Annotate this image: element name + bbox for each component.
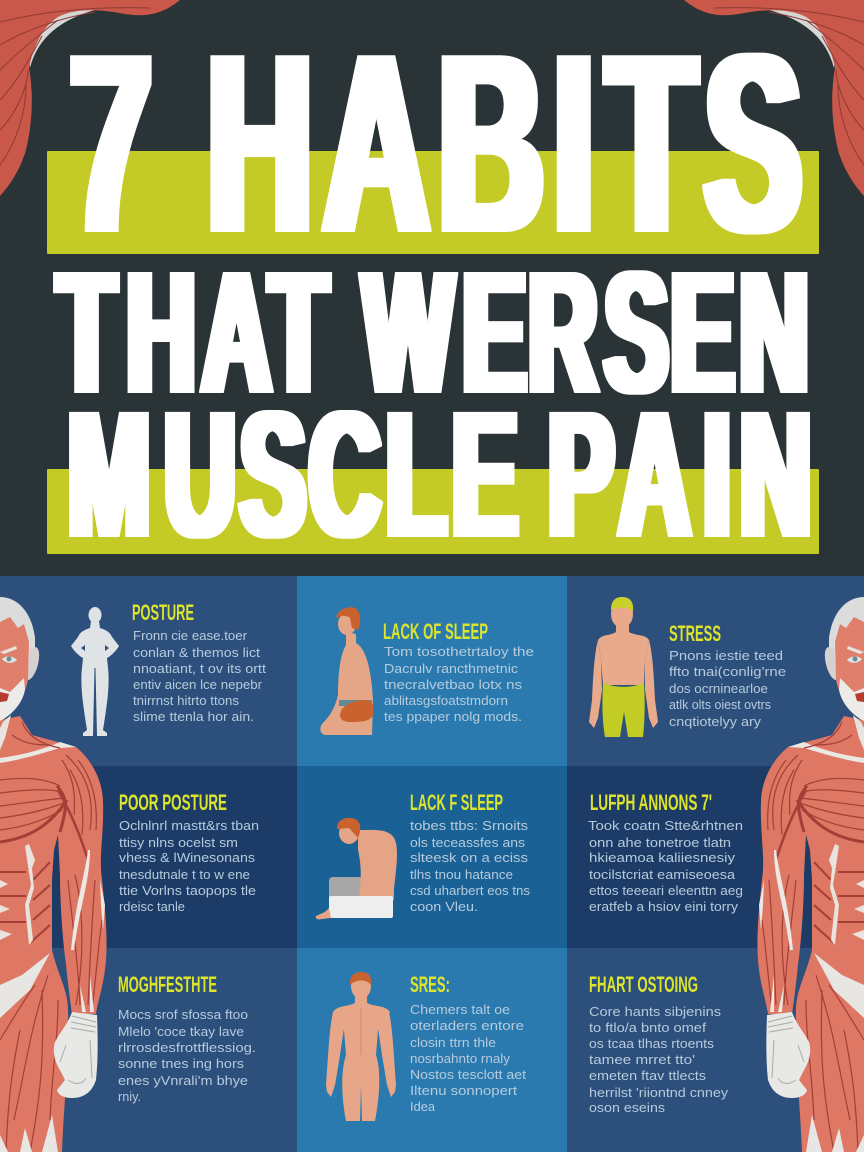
panel: lack of sleep (297, 576, 567, 766)
text block: emeten ftav ttlects (589, 1069, 706, 1083)
text block: Idea (410, 1100, 435, 1114)
text block: dos ocrninearloe (669, 682, 768, 696)
text block: vhess & lWinesonans (119, 851, 255, 865)
text block: tnirrnst hitrto ttons (133, 694, 239, 708)
text block: nnoatiant, t ov its ortt (133, 662, 267, 676)
anatomy figure: right (757, 597, 864, 1152)
text block: conlan & themos lict (133, 646, 261, 660)
heading: LACK F SLEEP (410, 790, 503, 815)
text block: nosrbahnto rnaly (410, 1052, 511, 1066)
heading: STRESS (669, 621, 721, 646)
decoration: top right muscle (684, 0, 864, 196)
panel: stress 2 (297, 948, 567, 1152)
text block: Nostos tesclott aet (410, 1068, 527, 1082)
text block (588, 819, 743, 914)
panel: posture (0, 576, 297, 766)
icon: figure in yellow shorts (589, 597, 658, 737)
text block: tes ppaper nolg mods. (384, 710, 522, 724)
text block: tocilstcriat eamiseoesa (589, 868, 735, 882)
text block: Core hants sibjenins (589, 1005, 721, 1019)
panel: stress (567, 576, 864, 766)
heading: MOGHFESTHTE (118, 972, 217, 997)
text block: eratfeb a hsiov eini torry (589, 900, 739, 914)
text block: ols teceassfes ans (410, 836, 525, 850)
text block: Oclnlnrl mastt&rs tban (119, 819, 259, 833)
title lines 2 and 3 (57, 236, 811, 574)
text block: sonne tnes ing hors (118, 1057, 244, 1071)
text block: ttie Vorlns taopops tle (119, 884, 256, 898)
text block: Fronn cie ease.toer (133, 629, 247, 643)
text block: ablitasgsfoatstmdorn (384, 694, 508, 708)
text block: coon Vleu. (410, 900, 478, 914)
text block: slime ttenla hor ain. (133, 710, 254, 724)
panel: lufph annons (567, 766, 864, 948)
text block: Tom tosothetrtaloy the (384, 645, 534, 659)
text block: Dacrulv rancthmetnic (384, 662, 518, 676)
text block (133, 629, 267, 724)
text block: oterladers entore (410, 1019, 524, 1033)
text block: onn ahe tonetroe tlatn (589, 836, 731, 850)
panel: moghfesthte (0, 948, 297, 1152)
yellow highlight bar: bottom (47, 469, 819, 554)
icon: white silhouette (71, 607, 119, 736)
icon: bent figure on block (316, 818, 397, 919)
text block: Mocs srof sfossa ftoo (118, 1008, 248, 1022)
text block: closin ttrn thle (410, 1036, 496, 1050)
text block (669, 649, 786, 729)
heading: POSTURE (132, 600, 194, 625)
text block: tobes ttbs: Srnoits (410, 819, 528, 833)
text block (384, 645, 534, 724)
text block: Mlelo 'coce tkay lave (118, 1025, 244, 1039)
text block: entiv aicen lce nepebr (133, 678, 262, 692)
text block: atlk olts oiest ovtrs (669, 698, 771, 712)
text block: to ftlo/a bnto omef (589, 1021, 707, 1035)
text block: rlrrosdesfrottflessiog. (118, 1041, 256, 1055)
text block: slteesk on a eciss (410, 851, 528, 865)
title lines 2 and 3: MUSCLE PAIN (68, 374, 811, 574)
decoration: top left muscle (0, 0, 180, 196)
text block: ttisy nlns ocelst sm (119, 836, 238, 850)
panel: fhart ostoing (567, 948, 864, 1152)
text block: Pnons iestie teed (669, 649, 783, 663)
anatomy figure: left (0, 597, 107, 1152)
panel: poor posture (0, 766, 297, 948)
heading: SRES: (410, 972, 450, 997)
text block (118, 1008, 256, 1104)
text block (589, 1005, 729, 1115)
title line 1: 7 HABITS (70, 1, 802, 285)
text block: cnqtiotelyy ary (669, 715, 762, 729)
text block: tnesdutnale t to w ene (119, 868, 250, 882)
icon: seated figure (320, 607, 374, 735)
text block: rniy. (118, 1090, 141, 1104)
heading: FHART OSTOING (589, 972, 698, 997)
text block: herrilst 'riiontnd cnney (589, 1086, 729, 1100)
panel: lack of sleep 2 (297, 766, 567, 948)
text block (119, 819, 259, 914)
text block (410, 1003, 527, 1114)
title lines 2 and 3: THAT WERSEN (57, 236, 808, 429)
text block: Iltenu sonnopert (410, 1084, 518, 1098)
icon: standing figure (326, 972, 396, 1121)
text block: ffto tnai(conlig'rne (669, 665, 786, 679)
text block: enes yVnrali'm bhye (118, 1074, 248, 1088)
text block: rdeisc tanle (119, 900, 185, 914)
text block: Chemers talt oe (410, 1003, 510, 1017)
heading: POOR POSTURE (119, 790, 227, 815)
text block: Took coatn Stte&rhtnen (588, 819, 743, 833)
text block: tlhs tnou hatance (410, 868, 513, 882)
yellow highlight bar: top (47, 151, 819, 254)
text block (410, 819, 530, 914)
text block: oson eseins (589, 1101, 665, 1115)
text block: hkieamoa kaliiesnesiy (589, 851, 736, 865)
text block: ettos teeeari eleenttn aeg (589, 884, 743, 898)
text block: os tcaa tlhas rtoents (589, 1037, 714, 1051)
text block: csd uharbert eos tns (410, 884, 530, 898)
text block: tamee mrret tto' (589, 1053, 695, 1067)
heading: LACK OF SLEEP (383, 619, 488, 644)
text block: tnecralvetbao lotx ns (384, 678, 522, 692)
heading: LUFPH ANNONS 7' (590, 790, 712, 815)
